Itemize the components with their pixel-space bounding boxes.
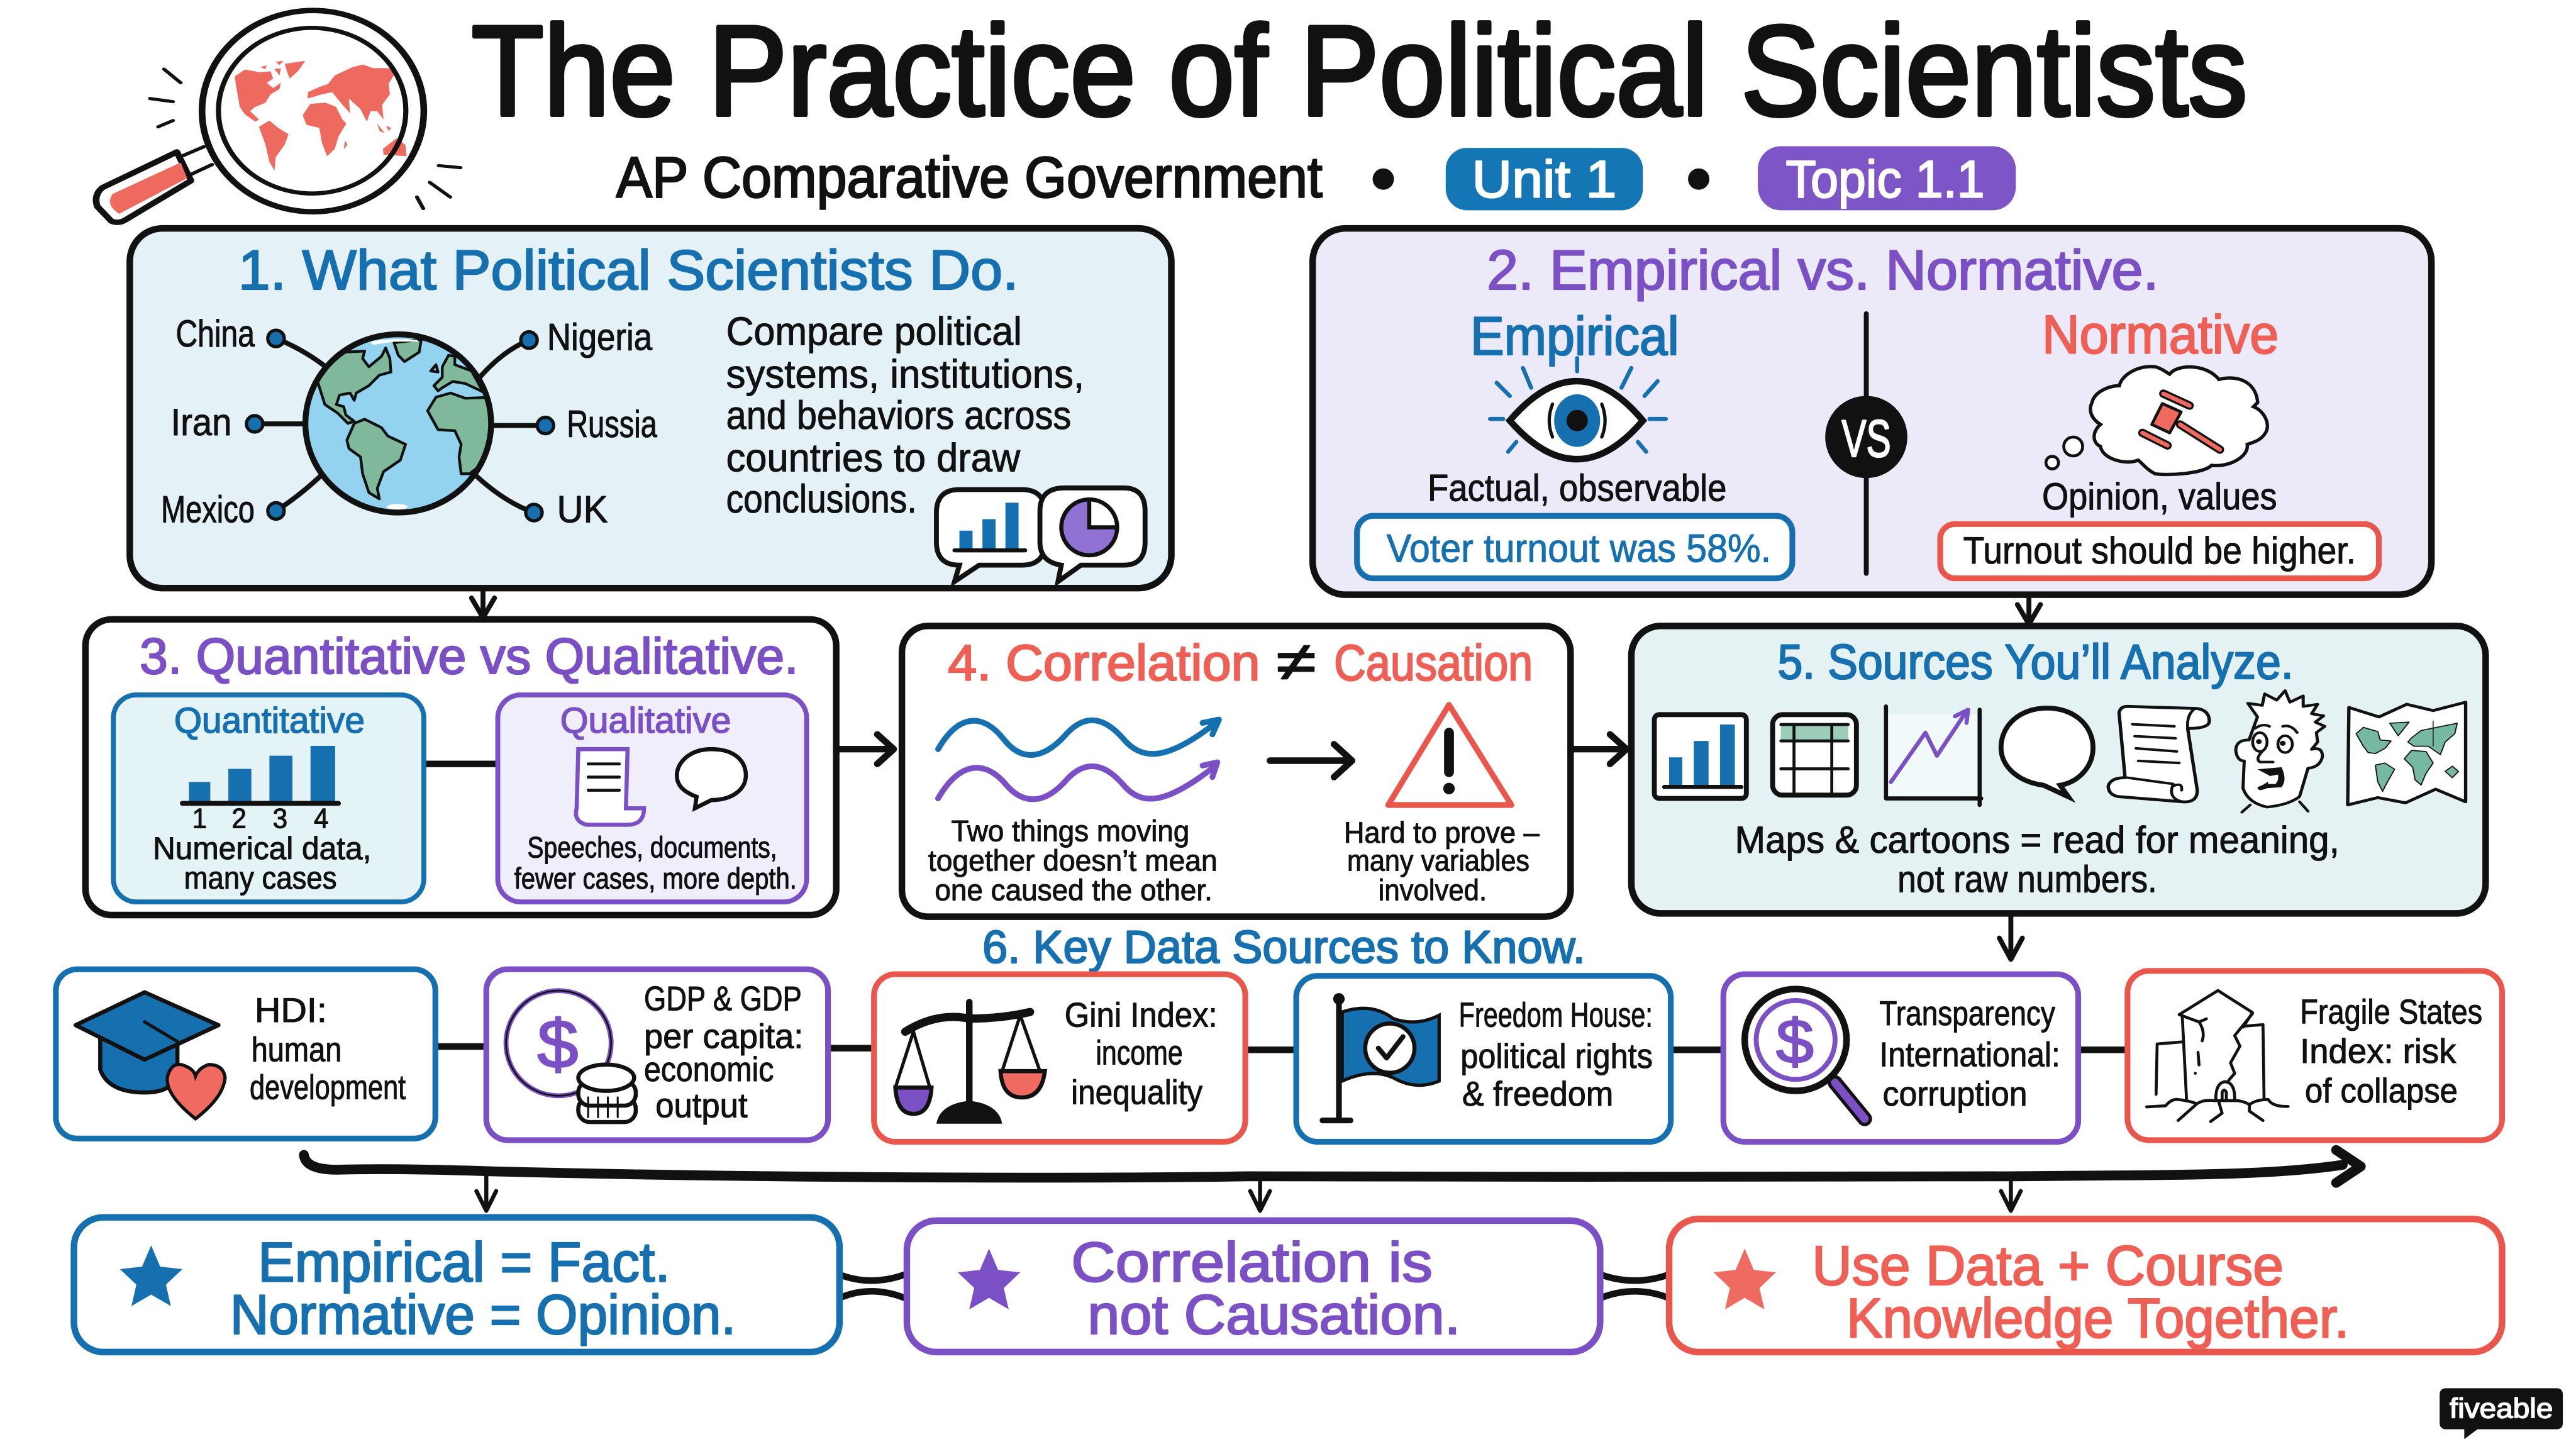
description text: systems, institutions, (726, 352, 1084, 396)
panel: 1. What Political Scientists Do (130, 228, 1172, 588)
icon: flag with check (1323, 993, 1439, 1121)
caption: correlation: Two things moving (951, 814, 1189, 847)
arrow: down to takeaway 3 (2001, 1176, 2021, 1211)
panel: 4. Correlation is not Causation (902, 626, 1570, 917)
text: corruption (1883, 1074, 2028, 1113)
text: political rights (1460, 1036, 1653, 1075)
sub-panel: Quantitative: Quantitative (174, 701, 365, 741)
description text (726, 310, 1084, 521)
text: Use Data + Course (1812, 1235, 2284, 1297)
icon: magnifier with dollar: $ (1776, 1007, 1814, 1077)
subtitle: AP Comparative Government (616, 145, 1323, 209)
caption: Factual, observable: Factual, observable (1428, 467, 1726, 509)
icon: graduation cap with heart (75, 992, 225, 1119)
icon: political cartoon face (2236, 691, 2325, 813)
card: Gini Index (874, 974, 1245, 1142)
panel: 2. Empirical vs Normative (1313, 228, 2431, 595)
sub-panel: Qualitative: Speeches, documents, (528, 831, 777, 864)
arrow: down to takeaway 2 (1250, 1176, 1270, 1211)
sub-panel: Quantitative: many cases (184, 860, 337, 896)
description text: Compare political (726, 310, 1022, 354)
arrow: down to takeaway 1 (477, 1176, 496, 1211)
badge: Unit 1: Unit 1 (1472, 149, 1616, 208)
heading: 1. What Political Scientists Do. (238, 239, 1019, 301)
text: Knowledge Together. (1846, 1287, 2350, 1349)
description text: countries to draw (726, 436, 1021, 480)
icon: star (958, 1248, 1020, 1309)
text (1879, 994, 2060, 1113)
arrow: panel 4 to panel 5 (1570, 735, 1626, 764)
heading: 5. Sources You’ll Analyze. (1777, 634, 2294, 689)
column heading: Empirical: Empirical (1470, 306, 1679, 367)
country labels: Russia (567, 403, 657, 445)
text: economic (644, 1050, 774, 1089)
text: Fragile States (2300, 992, 2482, 1031)
text (1065, 996, 1218, 1111)
connectors between data source cards (435, 1046, 2128, 1050)
text: International: (1879, 1035, 2060, 1074)
divider with VS badge: VS (1841, 409, 1891, 468)
icon: thought cloud with gavel (2046, 367, 2267, 474)
example: normative: Turnout should be higher. (1963, 530, 2356, 572)
description text: and behaviors across (726, 394, 1071, 438)
caption: causation (1344, 816, 1540, 907)
icon: coin and stack (506, 991, 636, 1122)
separator dot (1373, 169, 1394, 190)
text: Correlation is (1071, 1231, 1433, 1294)
globe with country connectors (247, 330, 553, 521)
text: development (250, 1068, 406, 1107)
badge: Unit 1 (1446, 148, 1643, 210)
text: not Causation. (1087, 1284, 1460, 1346)
panel: 5. Sources You'll Analyze (1631, 626, 2485, 913)
card: GDP (486, 969, 828, 1140)
text: human (252, 1030, 341, 1069)
sub-panel: Quantitative: 1 (192, 804, 207, 835)
caption: causation: involved. (1379, 874, 1487, 907)
text (1812, 1235, 2350, 1349)
heading: 4. Correlation (948, 635, 1260, 691)
sub-panel: Qualitative (498, 695, 807, 902)
country labels (161, 313, 657, 531)
text: per capita: (644, 1017, 803, 1056)
arrow: panel 3 to panel 4 (836, 735, 894, 764)
icon: speech bubble (2001, 708, 2093, 797)
text: Normative = Opinion. (230, 1284, 736, 1346)
sub-panel: Qualitative: fewer cases, more depth. (514, 862, 797, 895)
icon: magnifying glass over world map (96, 11, 460, 223)
heading: 3. Quantitative vs Qualitative. (140, 628, 799, 685)
sub-panel: Qualitative: Qualitative (560, 701, 731, 741)
icon: data table (1773, 714, 1857, 795)
caption: causation: Hard to prove – (1344, 816, 1540, 849)
country labels: UK (557, 489, 608, 531)
text (250, 991, 406, 1107)
icon: warning triangle (1388, 705, 1511, 805)
links between takeaways (836, 1273, 1672, 1299)
text: Freedom House: (1459, 996, 1653, 1035)
caption: Opinion, values: Opinion, values (2042, 475, 2277, 518)
card: HDI (56, 969, 435, 1138)
divider with VS badge (1825, 314, 1907, 574)
text (1071, 1231, 1460, 1346)
example: empirical (1357, 516, 1792, 579)
icon: balance scale (896, 1002, 1045, 1124)
text: Empirical = Fact. (258, 1231, 670, 1294)
icon: crumbling building (2146, 991, 2288, 1121)
heading: 6. Key Data Sources to Know: 6. Key Data Sources to Know. (982, 922, 1585, 973)
text: output (655, 1085, 748, 1124)
heading (948, 631, 1533, 692)
arrow: panel 1 to panel 3 (472, 588, 494, 618)
heading: Causation (1334, 635, 1533, 691)
separator dot (1688, 169, 1709, 190)
icon: star (1714, 1248, 1776, 1309)
icon: folded world map (2348, 702, 2466, 805)
card: Freedom House (1296, 976, 1671, 1142)
logo: fiveable (2440, 1388, 2563, 1439)
caption: causation: many variables (1347, 843, 1530, 877)
text: HDI: (255, 991, 327, 1030)
text: & freedom (1462, 1074, 1613, 1113)
country labels: China (176, 313, 255, 355)
text: income (1096, 1033, 1183, 1072)
icon: coin and stack: $ (537, 1006, 579, 1083)
text: Gini Index: (1065, 996, 1218, 1035)
title: The Practice of Political Scientists (472, 0, 2248, 143)
sub-panel: Quantitative (113, 695, 424, 902)
heading: ≠ (1277, 631, 1316, 692)
text: Transparency (1879, 994, 2055, 1033)
icon: bar chart card (1655, 714, 1746, 799)
arrow: panel 2 to panel 5 (2018, 595, 2040, 625)
chart: two moving lines (938, 719, 1219, 799)
takeaway: Correlation is not Causation (907, 1221, 1600, 1352)
card: Fragile States Index (2128, 971, 2502, 1140)
text: GDP & GDP (644, 979, 802, 1018)
icon: trend chart (1884, 706, 1981, 805)
caption (1735, 819, 2340, 900)
arrow: long curved flow arrow (304, 1150, 2361, 1183)
arrow: correlation to warning (1270, 744, 1352, 777)
text: inequality (1071, 1072, 1203, 1111)
caption: correlation: together doesn’t mean (928, 843, 1218, 877)
caption: Maps & cartoons = read for meaning, (1735, 819, 2340, 861)
sub-panel: Quantitative: 2 (231, 804, 247, 835)
text (644, 979, 803, 1124)
icon: chart speech bubbles (936, 488, 1145, 582)
icon: eye (1490, 358, 1666, 459)
logo: fiveable: fiveable (2450, 1393, 2553, 1424)
icons: scroll, cartoon face and folded map (2108, 691, 2466, 813)
badge: Topic 1.1: Topic 1.1 (1786, 149, 1985, 208)
icon: star (120, 1245, 182, 1306)
card: Transparency International (1723, 974, 2078, 1142)
description text: conclusions. (726, 477, 917, 521)
caption: not raw numbers. (1897, 858, 2157, 900)
country labels: Mexico (161, 489, 255, 531)
panel: 3. Quantitative vs Qualitative (86, 619, 836, 915)
caption: correlation: one caused the other. (935, 874, 1213, 907)
text (230, 1231, 736, 1346)
sub-panel: Quantitative: 4 (314, 804, 328, 835)
sub-panel: Quantitative: Numerical data, (153, 831, 371, 866)
country labels: Nigeria (547, 316, 653, 358)
text (2300, 992, 2482, 1110)
icon: magnifier with dollar (1745, 989, 1865, 1119)
caption: correlation (928, 814, 1218, 907)
arrow: panel 5 to data sources (1999, 913, 2023, 960)
icon: document scroll (2108, 706, 2209, 802)
takeaway: Empirical = Fact (74, 1218, 840, 1352)
heading: 2. Empirical vs. Normative. (1487, 239, 2158, 301)
connector (424, 763, 498, 765)
column heading: Normative: Normative (2042, 305, 2279, 365)
example: empirical: Voter turnout was 58%. (1387, 526, 1771, 570)
text (1459, 996, 1653, 1113)
text: of collapse (2305, 1071, 2458, 1110)
country labels: Iran (171, 401, 231, 443)
sub-panel: Quantitative: 3 (273, 804, 287, 835)
text: Index: risk (2300, 1031, 2457, 1070)
takeaway: Use Data + Course Knowledge Together (1669, 1219, 2502, 1352)
